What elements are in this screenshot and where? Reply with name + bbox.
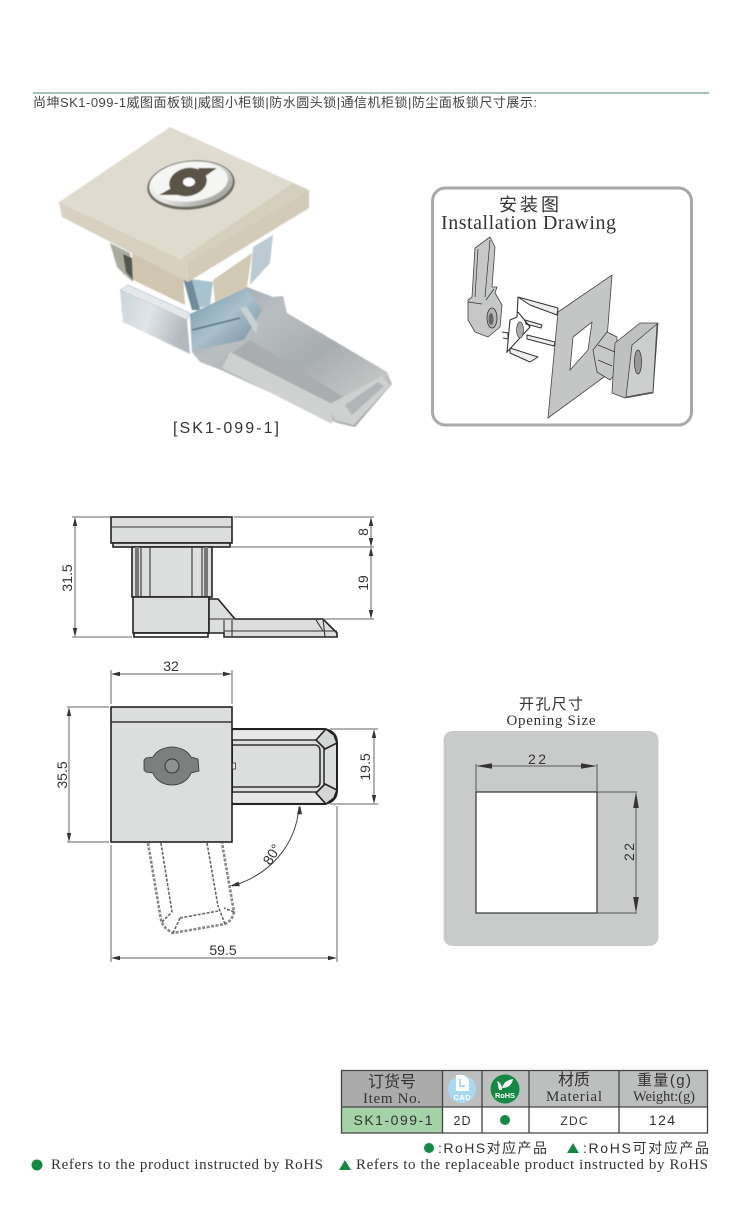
side elevation drawing (59, 517, 374, 637)
header: material: 材质 (558, 1071, 590, 1089)
item number cell (341, 1107, 442, 1133)
icon: CAD: CAD (454, 1093, 471, 1102)
white data cells (442, 1107, 708, 1133)
row values: SK1-099-1 (354, 1112, 433, 1128)
legend Chinese line (424, 1140, 709, 1156)
panel: installation drawing (432, 188, 692, 425)
metal side clips (110, 235, 273, 285)
rotation angle arc (230, 805, 302, 886)
key cylinder (145, 156, 237, 214)
row values: 2D (454, 1114, 470, 1128)
side dimensions: 31.5 (59, 564, 75, 592)
metal housing box (120, 285, 190, 354)
front plate (111, 707, 232, 842)
RoHS legend (32, 1140, 709, 1173)
lock photo artwork (59, 127, 392, 427)
beige plate (59, 127, 309, 282)
front dimensions (54, 658, 378, 962)
beige body blocks (132, 253, 252, 310)
installation heading: 安装图 (499, 195, 559, 215)
side dimensions: 8 (355, 528, 371, 536)
installation heading: Installation Drawing (441, 212, 616, 234)
opening dimensions: 22 (621, 843, 637, 861)
installation heading (441, 195, 616, 234)
header: item no (363, 1073, 421, 1107)
legend Chinese line: :RoHS对应产品 (438, 1140, 547, 1156)
legend English line: Refers to the replaceable product instructed by RoHS (356, 1157, 708, 1173)
header: item no: 订货号 (368, 1073, 416, 1091)
opening dimensions: 22 (528, 751, 546, 767)
header: item no: Item No. (363, 1091, 421, 1107)
opening size heading: Opening Size (506, 713, 596, 729)
header: material: Material (546, 1089, 602, 1105)
legend English line (32, 1157, 708, 1173)
lever arm outline (232, 729, 337, 804)
mounting panel with square hole (548, 275, 612, 418)
table grid (342, 1070, 708, 1133)
row values (354, 1112, 675, 1128)
row values: 124 (649, 1112, 675, 1128)
header: weight: Weight:(g) (633, 1089, 695, 1105)
exploded lever (468, 237, 502, 337)
RoHS dot (500, 1115, 510, 1125)
lock body exploded (593, 323, 658, 398)
front dimensions: 35.5 (54, 761, 70, 789)
header: weight (633, 1072, 695, 1105)
key slot (144, 747, 199, 785)
exploded bracket (502, 297, 558, 362)
header rule and caption: 尚坤SK1-099-1威图面板锁|威图小柜锁|防水圆头锁|通信机柜锁|防尘面板锁尺寸展示: (33, 95, 537, 110)
rotation angle arc: 80° (259, 841, 284, 868)
front dimensions: 32 (163, 658, 179, 674)
side dimensions (59, 517, 374, 637)
table header band (341, 1071, 708, 1107)
model label: [SK1-099-1] (173, 420, 279, 437)
header: material (546, 1071, 602, 1105)
icon: RoHS (490, 1074, 520, 1104)
front dimensions: 59.5 (209, 942, 237, 958)
product photo: SK1-099-1 lock (59, 127, 392, 437)
front elevation drawing (54, 658, 378, 962)
grey panel with cutout (444, 731, 658, 946)
front dimensions: 19.5 (357, 753, 373, 781)
opening size heading: 开孔尺寸 (519, 696, 583, 713)
side view lock outline (111, 517, 337, 637)
legend English line: Refers to the product instructed by RoHS (51, 1157, 323, 1173)
legend Chinese line: :RoHS可对应产品 (583, 1140, 709, 1156)
opening dimensions (476, 751, 639, 913)
icon: CAD (448, 1075, 476, 1103)
opening size diagram (444, 696, 658, 946)
item number header cell (341, 1071, 442, 1107)
rotated lever dashed outline (148, 843, 234, 933)
icon: RoHS: RoHS (495, 1091, 515, 1100)
row values: ZDC (560, 1114, 588, 1128)
specification table (341, 1070, 708, 1133)
header: weight: 重量(g) (637, 1072, 691, 1089)
metal lever arm (190, 287, 392, 427)
side dimensions: 19 (355, 575, 371, 591)
opening size heading (506, 696, 596, 729)
